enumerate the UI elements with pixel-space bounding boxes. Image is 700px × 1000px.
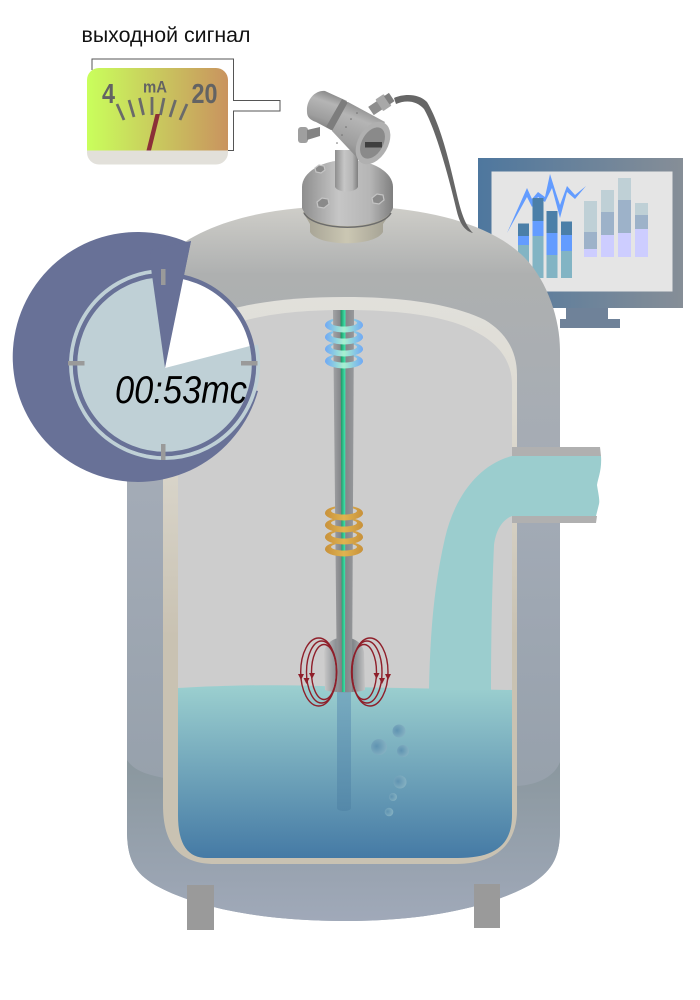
- blue coils: back part: [325, 318, 363, 368]
- water: [178, 685, 512, 858]
- timer elapsed disc: [76, 276, 252, 452]
- transmitter cable: [394, 95, 473, 233]
- side knob: [298, 127, 320, 143]
- tank feet: [187, 884, 500, 930]
- meter labels: 20: [192, 78, 218, 109]
- blue coils: front part: [325, 323, 363, 368]
- meter labels: 4: [102, 78, 115, 109]
- orange coils: front part: [325, 511, 363, 557]
- housing dots: [336, 112, 358, 144]
- timer dark wedge: [150, 241, 191, 368]
- housing cylinder: [307, 91, 397, 170]
- left bar chart: [518, 198, 572, 278]
- timer outer light ring: [71, 272, 258, 458]
- monitor: [478, 158, 683, 328]
- tank inner liner: [163, 297, 517, 864]
- tank lower band: [127, 760, 560, 921]
- tank outer shell: [127, 206, 560, 921]
- timer outer crescent: [13, 232, 258, 482]
- display: [365, 142, 382, 148]
- meter: 4-20 mA: [87, 68, 228, 164]
- timer: [13, 232, 258, 482]
- monitor stand: [560, 300, 620, 328]
- tank inner cavity: [178, 310, 512, 700]
- submerged rod: [337, 692, 351, 811]
- wire from meter to transmitter: [92, 59, 280, 150]
- transmitter: [298, 91, 397, 243]
- right bar chart: [584, 178, 648, 257]
- timer value: 00:53mc: [115, 369, 247, 412]
- timer tick marks: [68, 269, 258, 460]
- cable gland: [367, 91, 396, 117]
- flange bolts: [315, 165, 384, 208]
- timer white sector: [165, 278, 250, 368]
- field arrowheads: [298, 673, 391, 684]
- sensor green core: [340, 310, 346, 692]
- heading: output signal: выходной сигнал: [82, 24, 250, 47]
- meter labels: mA: [143, 78, 167, 97]
- process connection: [303, 212, 391, 243]
- neck: [335, 150, 358, 192]
- meter scale ticks: [117, 97, 187, 120]
- flange: [302, 187, 393, 226]
- meter needle: [146, 114, 160, 150]
- orange coils: back part: [325, 506, 363, 557]
- zigzag line graph: [507, 174, 586, 233]
- timer purple ring: [75, 275, 254, 454]
- pipe flanges: [512, 447, 601, 456]
- meter labels: [102, 78, 218, 109]
- air bubbles: [371, 724, 409, 816]
- float: [324, 637, 365, 692]
- sensor rod: [333, 310, 354, 692]
- inlet pipe: [429, 447, 601, 690]
- magnetic field lines: [298, 638, 391, 706]
